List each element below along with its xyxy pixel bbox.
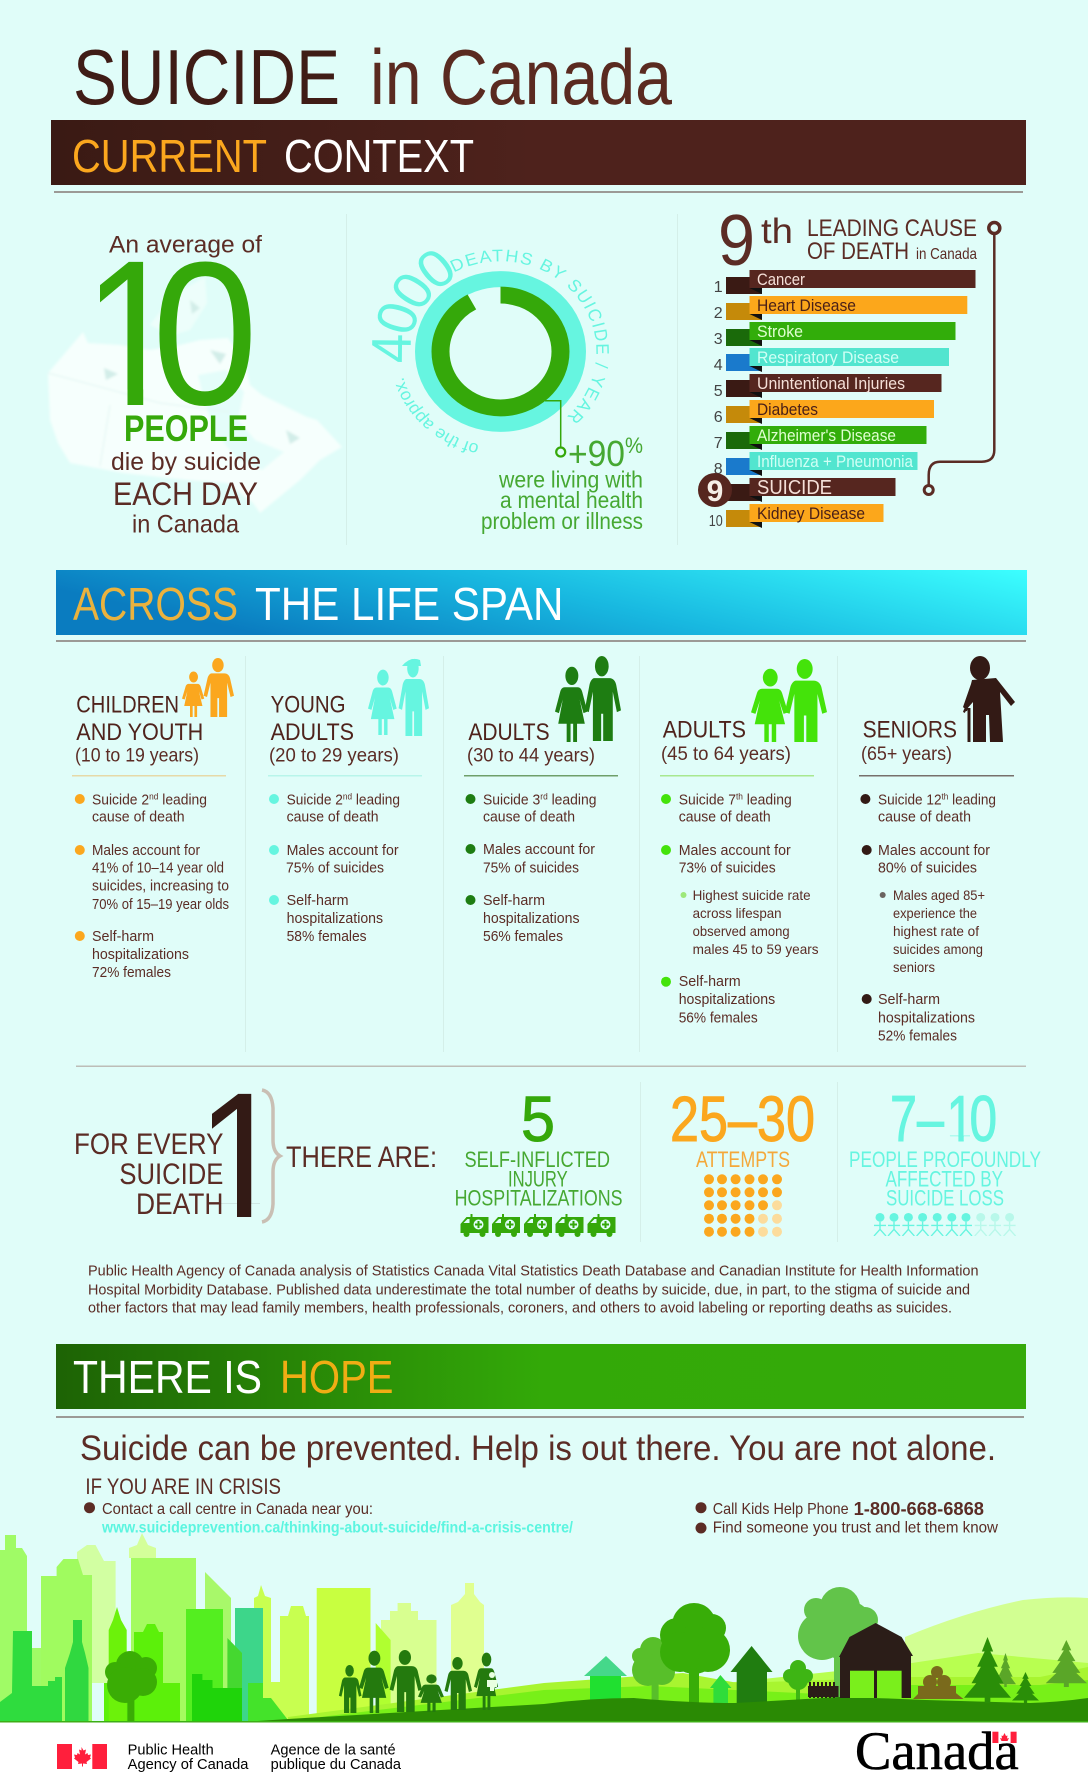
bullet: males share: 80% of suicides: [878, 860, 977, 877]
text: living with mental illness: a mental health: [500, 487, 643, 513]
bar: respiratory disease: Respiratory Disease: [757, 349, 899, 367]
panel: leading causes of death: [698, 201, 1000, 530]
heading: 9th leading cause: [718, 201, 977, 281]
bullet: males share: Males account for: [679, 842, 791, 859]
heading: young adults: (20 to 29 years): [269, 746, 399, 767]
bullet: leading cause: cause of death: [878, 809, 971, 826]
section banner: across the life span: THE LIFE SPAN: [255, 578, 564, 630]
stat: 25-30 attempts: [670, 1083, 815, 1237]
tree: light: [632, 1637, 675, 1702]
text: there are: THERE ARE:: [286, 1141, 437, 1174]
bullet: leading cause: Suicide 2: [287, 791, 348, 808]
heading: children and youth: CHILDREN: [76, 692, 179, 719]
text: living with mental illness: were living with: [498, 467, 643, 493]
panel: adults 45 to 64: [660, 659, 827, 1027]
bullet: self-harm: hospitalizations: [287, 910, 383, 927]
bullet: males share: Males account for: [92, 842, 200, 859]
sub-bullet: males aged 85 plus: seniors: [893, 959, 935, 975]
bullet: males share: 75% of suicides: [286, 860, 384, 877]
bar: cancer: 1: [714, 279, 723, 296]
farm: [808, 1623, 1087, 1703]
panel: adults 30 to 44: [464, 656, 621, 945]
panel: children and youth: [72, 658, 234, 981]
text: each day: EACH DAY: [113, 476, 258, 512]
stat: 5 hospitalizations: 5: [521, 1083, 555, 1155]
text: living with mental illness: [481, 467, 643, 534]
bullet: leading cause: Suicide 7: [679, 791, 740, 808]
bullet: find someone: Find someone you trust and let them know: [713, 1520, 998, 1537]
bullet: leading cause: leading: [548, 791, 596, 808]
label: hospitalizations: [455, 1147, 623, 1211]
heading: young adults: YOUNG: [271, 692, 346, 719]
bar chart: ranked causes: [698, 270, 976, 530]
bullet: males share: 70% of 15–19 year olds: [92, 896, 229, 913]
bar: respiratory disease: 4: [714, 357, 723, 374]
house: dark green: [730, 1646, 772, 1705]
bullet: leading cause: [75, 791, 207, 826]
ground: [243, 1697, 1088, 1722]
crisis help block: [84, 1474, 998, 1537]
big number 1: 1: [196, 1056, 286, 1256]
bar: respiratory disease: [714, 348, 949, 374]
bullet: self-harm: [75, 928, 189, 981]
bar: kidney disease: 10: [709, 513, 723, 530]
bar: diabetes: 6: [714, 409, 723, 426]
bullet: leading cause: Suicide 3: [483, 791, 545, 808]
label: hospitalizations: INJURY: [508, 1167, 568, 1192]
stat: 25-30 attempts: 25–30: [670, 1083, 815, 1155]
stat: 7-10 people affected: 0: [970, 1082, 997, 1155]
tree: city: [105, 1651, 157, 1722]
bullet: self-harm: Self-harm: [287, 892, 349, 909]
text: for every suicide death: SUICIDE: [119, 1158, 223, 1191]
section banner: current context: CURRENT: [72, 130, 267, 182]
bullet: leading cause: leading: [352, 791, 400, 808]
agency name: English: Agency of Canada: [128, 1757, 249, 1773]
bullet: leading cause: [860, 791, 996, 826]
text: die by suicide: die by suicide: [111, 448, 261, 476]
bar: influenza and pneumonia: 8: [714, 461, 723, 478]
label: people affected: AFFECTED BY: [886, 1167, 1003, 1192]
icon: map of Canada: [48, 277, 342, 513]
bullet: leading cause: nd: [343, 791, 352, 801]
text: for every suicide death: FOR EVERY: [74, 1128, 224, 1161]
bullet: self-harm: Self-harm: [679, 973, 741, 990]
bullet: leading cause: cause of death: [679, 809, 771, 826]
bar: alzheimer's disease: Alzheimer's Disease: [757, 427, 896, 445]
house: small green: [710, 1675, 732, 1704]
text: plus 90 percent: +90: [568, 433, 625, 474]
stat: 7-10 people affected: 1: [947, 1082, 974, 1155]
bar: suicide highlighted: [698, 473, 896, 508]
icon: orange figures: [182, 658, 234, 717]
big number 10: 0: [152, 220, 258, 448]
bullet: self-harm: 58% females: [287, 928, 367, 945]
logo: Canada wordmark: Canada: [855, 1721, 1019, 1781]
hay bales: [913, 1666, 964, 1699]
bullet: leading cause: [269, 791, 400, 826]
heading: adults: (30 to 44 years): [467, 746, 595, 767]
sub-bullet: highest rate: Highest suicide rate: [693, 887, 811, 903]
connector line: [924, 222, 1000, 494]
tree: back large: [798, 1587, 878, 1700]
bullet: males share: Males account for: [483, 841, 595, 858]
fence: [808, 1682, 838, 1698]
bullet: self-harm: 56% females: [483, 928, 563, 945]
bullet: leading cause: cause of death: [483, 809, 575, 826]
bullet: self-harm: hospitalizations: [92, 946, 189, 963]
bullet: leading cause: leading: [948, 791, 996, 808]
bullet: leading cause: cause of death: [92, 809, 185, 826]
heading: adults: ADULTS: [663, 717, 746, 744]
bullet: self-harm: [269, 892, 383, 945]
text: plus 90 percent: %: [625, 433, 643, 458]
heading: adults: [467, 719, 595, 767]
bullet: leading cause: [466, 791, 596, 826]
section banner: there is hope: THERE IS: [73, 1351, 262, 1403]
bullet: leading cause: leading: [743, 791, 792, 808]
bullet: kids help phone: Call Kids Help Phone: [713, 1501, 849, 1518]
bar: alzheimer's disease: 7: [714, 435, 723, 452]
agency name: English: [128, 1742, 249, 1773]
callout line: [545, 401, 565, 456]
sub-bullet: males aged 85 plus: [880, 887, 985, 975]
label: people affected: SUICIDE LOSS: [886, 1186, 1004, 1211]
bar: suicide highlighted: 9: [707, 475, 723, 508]
bullet: leading cause: Suicide 2: [92, 791, 154, 808]
text: living with mental illness: problem or illness: [481, 508, 643, 534]
title: SUICIDE: [73, 33, 340, 121]
bar: kidney disease: [709, 504, 884, 530]
heading: children and youth: (10 to 19 years): [75, 746, 199, 767]
bullet: males share: [466, 841, 595, 877]
footnote text: [88, 1263, 978, 1317]
bar: suicide highlighted: SUICIDE: [757, 477, 832, 499]
bar: alzheimer's disease: [714, 426, 926, 452]
heading: 9th leading cause: in Canada: [916, 246, 977, 263]
section banner: current context: CONTEXT: [284, 130, 474, 182]
sub-bullet: males aged 85 plus: experience the: [893, 905, 977, 921]
big number 10: 1: [83, 216, 181, 449]
heading: young adults: ADULTS: [271, 719, 354, 746]
bullet: self-harm: Self-harm: [878, 991, 940, 1008]
stat: 7-10 people affected: [849, 1082, 1041, 1236]
bullet: leading cause: cause of death: [287, 809, 379, 826]
panel: ten people each day: [48, 216, 342, 539]
bar: diabetes: [714, 400, 934, 426]
bullet: self-harm: 72% females: [92, 964, 171, 981]
bar: unintentional injuries: [714, 374, 942, 400]
panel: 4000 deaths donut: [372, 250, 643, 534]
bar: heart disease: [714, 296, 967, 322]
landscape illustration: [0, 1533, 1088, 1722]
bar: heart disease: Heart Disease: [757, 297, 856, 315]
panel: young adults: [268, 659, 429, 945]
bullet: self-harm: 56% females: [679, 1010, 758, 1027]
bar: unintentional injuries: Unintentional Injuries: [757, 375, 905, 393]
heading: adults: (45 to 64 years): [661, 744, 791, 765]
heading: 9th leading cause: th: [761, 212, 793, 251]
bullet: kids help phone: [696, 1499, 984, 1519]
bullet: males share: 75% of suicides: [483, 860, 579, 877]
bullet: call centre: Contact a call centre in Canada near you:: [102, 1501, 373, 1518]
bar: unintentional injuries: 5: [714, 383, 723, 400]
heading: children and youth: AND YOUTH: [76, 719, 203, 746]
sub-bullet: highest rate: males 45 to 59 years: [693, 941, 819, 957]
bullet: males share: [862, 842, 990, 877]
icon: dark green figures: [555, 656, 621, 742]
title: in Canada: [370, 33, 673, 121]
bullet: males share: 73% of suicides: [679, 860, 776, 877]
heading: 9th leading cause: LEADING CAUSE: [807, 215, 977, 242]
icon row: stick people: [874, 1213, 1016, 1236]
house: teal: [584, 1656, 627, 1704]
trees and houses: [584, 1587, 878, 1705]
heading: adults: ADULTS: [468, 719, 550, 746]
bar: heart disease: 2: [714, 305, 723, 322]
logo: Canadian flag: [57, 1744, 107, 1769]
label: attempts: ATTEMPTS: [696, 1147, 790, 1172]
bullet: kids help phone: 1-800-668-6868: [854, 1499, 984, 1519]
sub-bullet: males aged 85 plus: Males aged 85+: [893, 887, 985, 903]
curved label: of the approx.: of the approx.: [396, 378, 478, 452]
label: people affected: [849, 1147, 1041, 1211]
label: hospitalizations: HOSPITALIZATIONS: [455, 1186, 623, 1211]
bullet: self-harm: 52% females: [878, 1028, 957, 1045]
section banner: there is hope: HOPE: [280, 1351, 394, 1403]
bullet: call centre: www.suicideprevention.ca/thinking-about-suicide/find-a-crisis-centre/: [101, 1520, 573, 1537]
bullet: males share: [269, 842, 399, 877]
bar: diabetes: Diabetes: [757, 401, 818, 419]
bullet: leading cause: Suicide 12: [878, 791, 948, 808]
agency name: French: Agence de la santé: [271, 1742, 396, 1758]
curved number 4000: 4000: [372, 251, 453, 362]
bullet: call centre: [84, 1501, 573, 1537]
label: hospitalizations: SELF-INFLICTED: [464, 1147, 610, 1172]
heading: children and youth: [75, 692, 203, 767]
heading: seniors: [861, 717, 957, 765]
footnote text: Hospital Morbidity Database. Published data underestimate the total number of deaths by suicide, due, in part, to the stigma of suicide and: [88, 1281, 970, 1298]
section banner: there is hope: [56, 1344, 1026, 1409]
bullet: males share: Males account for: [878, 842, 990, 859]
text: suicide can be prevented: Suicide can be prevented. Help is out there. You are not alone.: [80, 1429, 996, 1468]
sub-bullet: males aged 85 plus: highest rate of: [893, 923, 979, 939]
bar: influenza and pneumonia: Influenza + Pneumonia: [757, 453, 914, 471]
dot grid: attempts: [704, 1174, 782, 1237]
section banner: across the life span: ACROSS: [73, 578, 238, 630]
bullet: males share: Males account for: [287, 842, 399, 859]
hills: [288, 1597, 1088, 1722]
heading: adults: [661, 717, 791, 765]
section banner: across the life span: [56, 570, 1027, 635]
family silhouette: [339, 1650, 498, 1713]
heading: 9th leading cause: OF DEATH: [807, 238, 909, 265]
bullet: leading cause: th: [736, 791, 743, 801]
bullet: leading cause: th: [942, 791, 948, 801]
text: for every suicide death: [74, 1128, 224, 1221]
icon: senior with cane: [963, 656, 1015, 742]
bullet: self-harm: [466, 892, 580, 945]
panel: for every suicide death: [76, 1088, 435, 1224]
brace: [262, 1090, 280, 1222]
big number 10: [100, 262, 251, 406]
bar: influenza and pneumonia: [714, 452, 918, 478]
tree: big: [660, 1603, 730, 1704]
bar: cancer: [714, 270, 976, 296]
icon row: ambulances: [460, 1214, 616, 1237]
icon: teal figures: [368, 659, 429, 736]
bullet: leading cause: [661, 791, 792, 826]
tree: small: [783, 1660, 813, 1700]
bullet: males share: suicides, increasing to: [92, 878, 229, 895]
sub-bullet: males aged 85 plus: suicides among: [893, 941, 983, 957]
heading: seniors: (65+ years): [861, 744, 952, 765]
curved label: deaths by suicide per year: DEATHS BY SUICIDE / YEAR: [450, 250, 609, 423]
footer: [0, 1721, 1088, 1792]
heading: seniors: SENIORS: [863, 717, 957, 744]
bullet: leading cause: rd: [540, 791, 548, 801]
agency name: French: [271, 1742, 402, 1773]
text: for every suicide death: DEATH: [136, 1188, 224, 1221]
barn: [839, 1623, 913, 1698]
bar: cancer: Cancer: [757, 271, 805, 289]
title: [73, 33, 673, 121]
bullet: males share: [661, 842, 791, 877]
pine trees: [964, 1637, 1087, 1703]
text: an average of: An average of: [109, 232, 262, 259]
bullet: males share: 41% of 10–14 year old: [92, 860, 224, 877]
text: in Canada: in Canada: [132, 511, 239, 539]
bullet: self-harm: Self-harm: [483, 892, 545, 909]
sub-bullet: highest rate: across lifespan: [693, 905, 782, 921]
panel: seniors: [859, 656, 1015, 1045]
sub-bullet: highest rate: [680, 887, 819, 957]
agency name: English: Public Health: [128, 1742, 214, 1758]
sub-bullet: highest rate: observed among: [693, 923, 790, 939]
donut chart: [372, 250, 609, 452]
stat: 5 hospitalizations: [455, 1083, 623, 1237]
footnote text: Public Health Agency of Canada analysis of Statistics Canada Vital Statistics Death Database and Canadian Institute for Health Information: [88, 1263, 978, 1280]
bar: stroke: [714, 322, 956, 348]
icon: bright green figures: [751, 659, 827, 742]
bullet: self-harm: [862, 991, 975, 1045]
heading: young adults: [269, 692, 399, 767]
text: people: PEOPLE: [124, 408, 248, 449]
bullet: self-harm: hospitalizations: [483, 910, 580, 927]
stat: 7-10 people affected: 7–: [890, 1082, 945, 1155]
bullet: males share: [75, 842, 229, 913]
bullet: self-harm: [661, 973, 775, 1027]
bullet: leading cause: leading: [158, 791, 207, 808]
section banner: current context: [51, 120, 1026, 185]
agency name: French: publique du Canada: [271, 1757, 402, 1773]
city skyline: [0, 1533, 484, 1722]
heading: 9th leading cause: 9: [718, 201, 755, 281]
bar: stroke: 3: [714, 331, 723, 348]
bar: stroke: Stroke: [757, 323, 803, 341]
label: people affected: PEOPLE PROFOUNDLY: [849, 1147, 1041, 1172]
bullet: leading cause: nd: [149, 791, 158, 801]
bullet: self-harm: Self-harm: [92, 928, 154, 945]
bar: kidney disease: Kidney Disease: [757, 505, 865, 523]
bullet: self-harm: hospitalizations: [679, 991, 775, 1008]
heading: if you are in crisis: IF YOU ARE IN CRISIS: [85, 1474, 281, 1499]
footnote text: other factors that may lead family members, health professionals, coroners, and others to avoid labeling or reporting deaths as suicides.: [88, 1300, 952, 1317]
bullet: self-harm: hospitalizations: [878, 1010, 975, 1027]
